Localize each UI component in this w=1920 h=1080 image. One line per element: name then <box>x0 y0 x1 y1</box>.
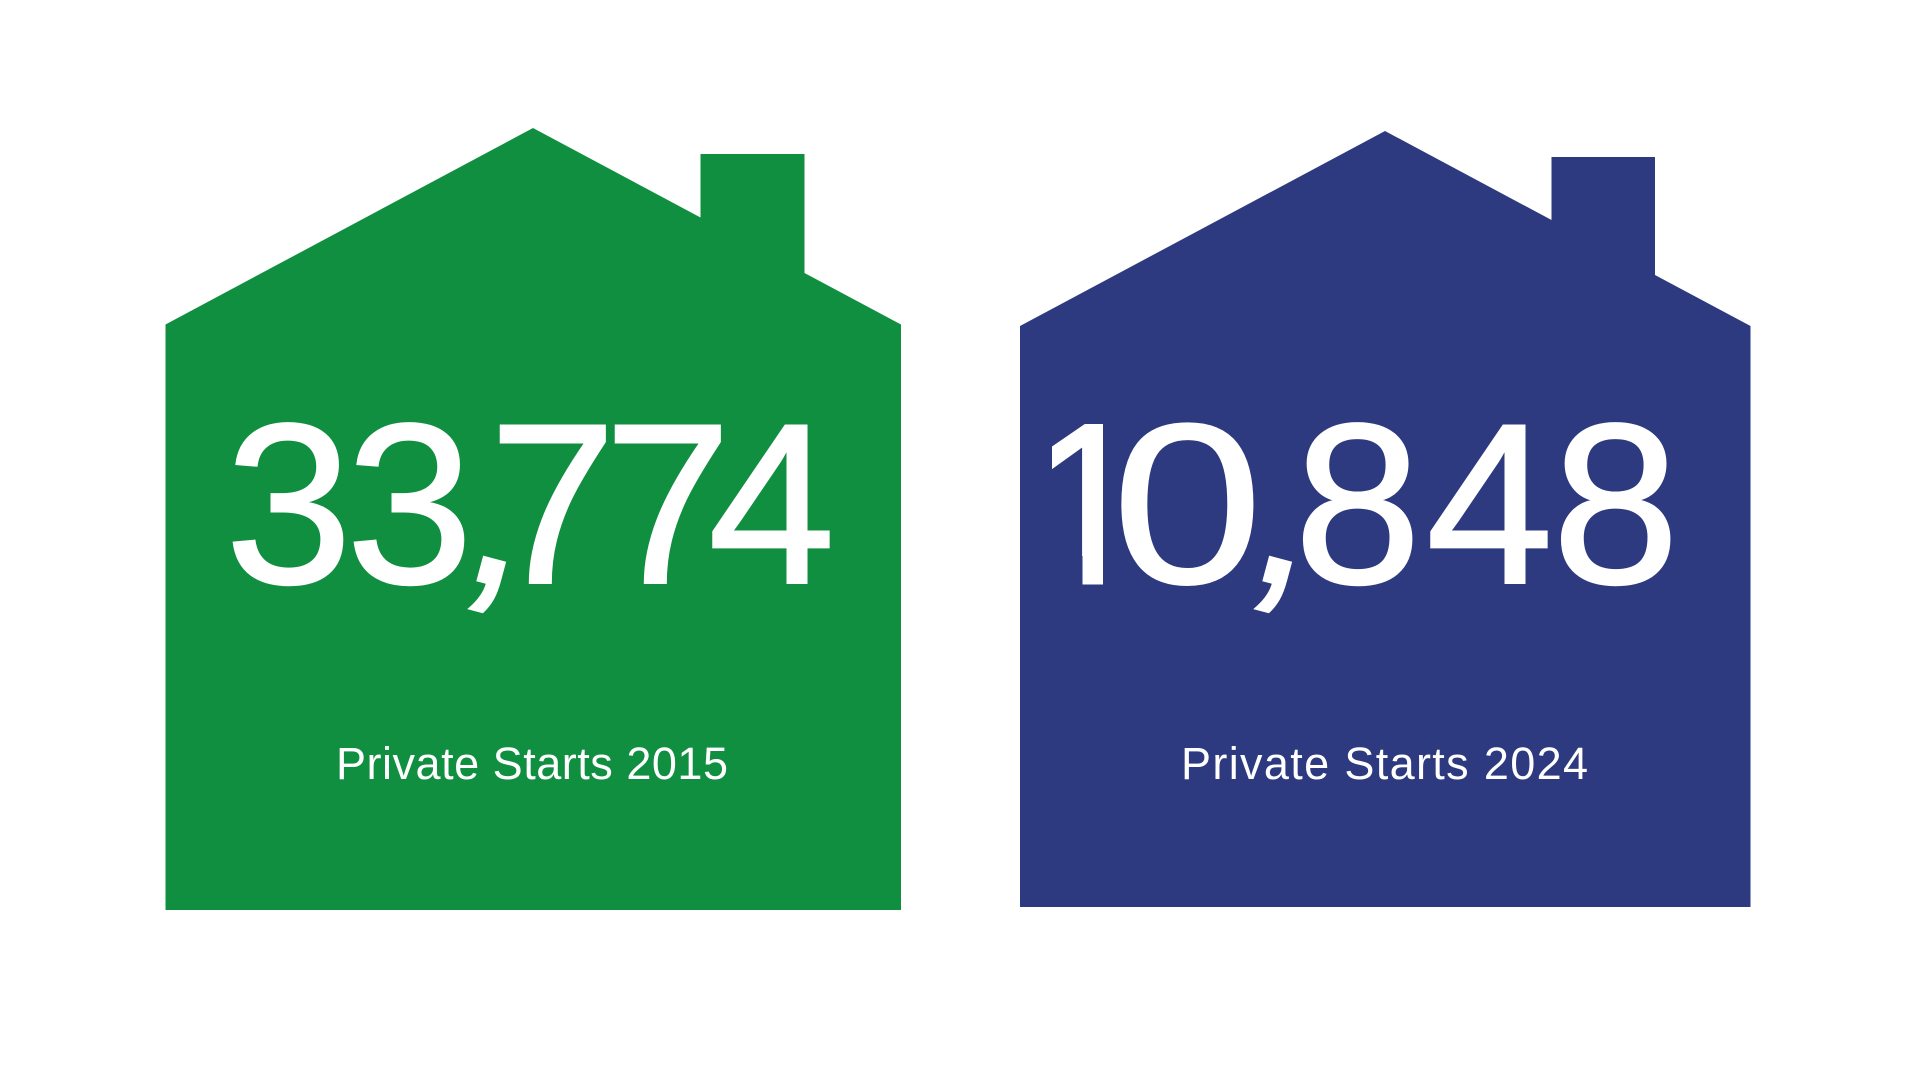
number: 10,848 <box>1052 422 1670 614</box>
digit 1: 1 <box>1026 376 1153 632</box>
digit 0: 0 <box>1112 376 1263 632</box>
label: Private Starts 2024: Private Starts 2024 <box>1181 738 1588 789</box>
panel: 2024 blue house <box>1020 131 1750 907</box>
digits ,848: ,848 <box>1230 375 1679 639</box>
icon: green house shape <box>166 128 901 910</box>
panel: 2015 green house <box>166 128 901 910</box>
icon: blue house shape <box>1020 131 1750 907</box>
label: Private Starts 2015: Private Starts 2015 <box>336 738 728 789</box>
number: 33,774: 33,774 <box>225 375 835 639</box>
